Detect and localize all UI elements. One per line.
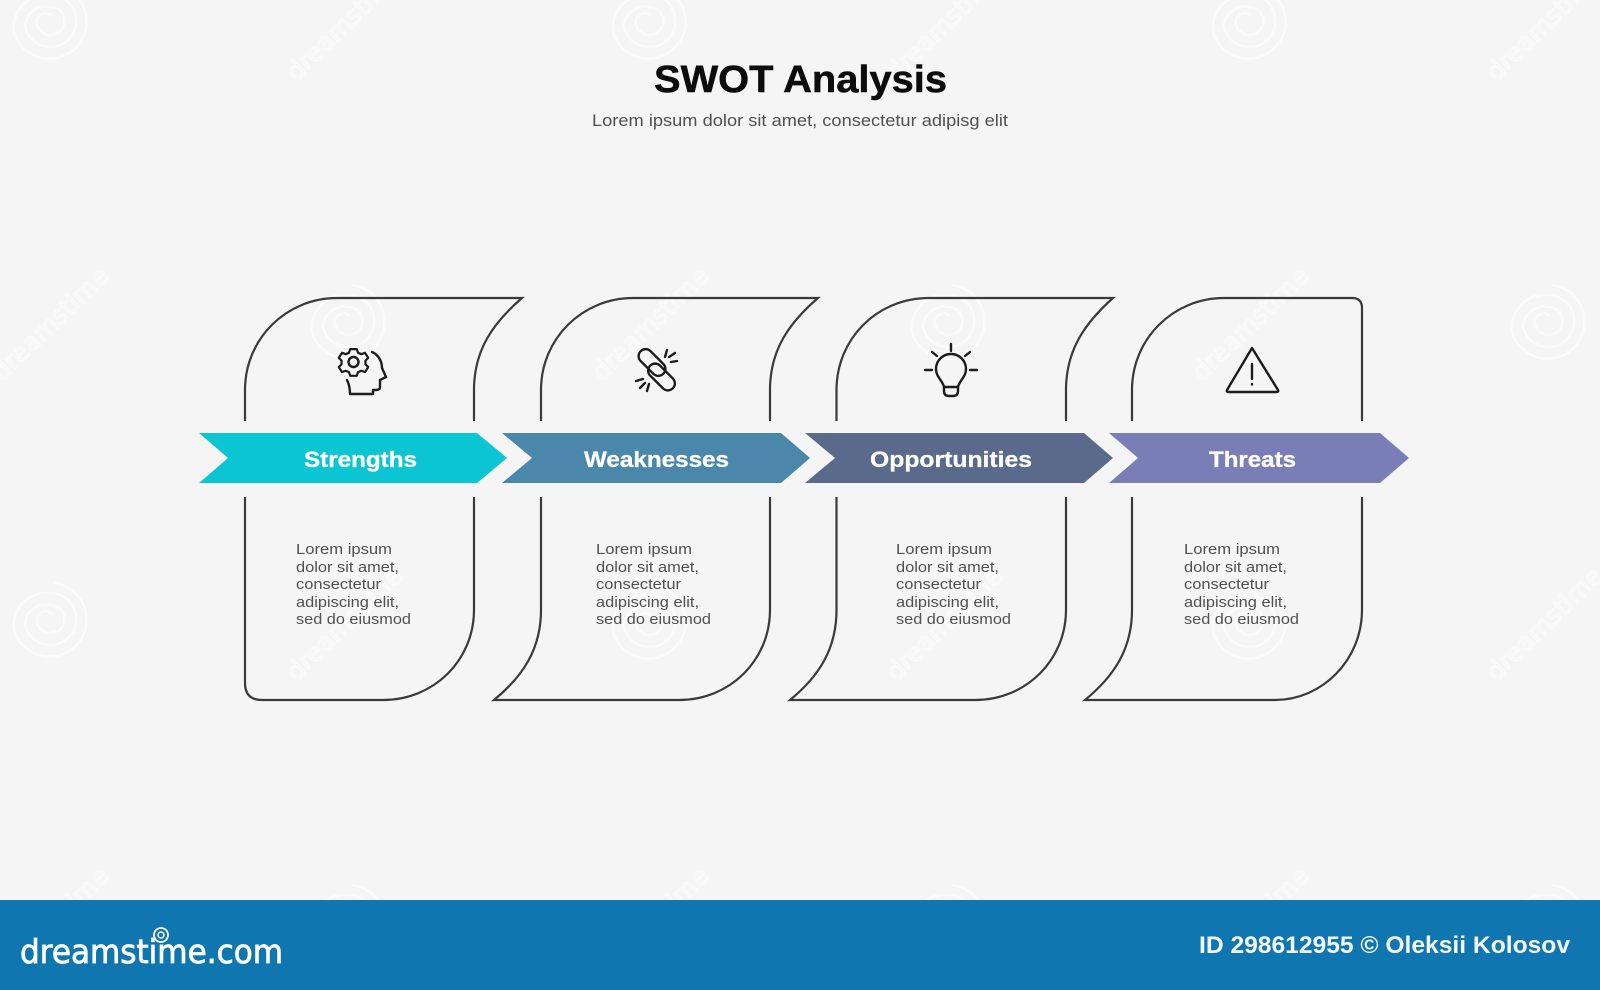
body text: strengths: sed do eiusmod (296, 611, 411, 628)
body text: weaknesses: Lorem ipsum (596, 541, 692, 558)
icon: gear in head (339, 349, 386, 394)
body text: threats (1184, 541, 1299, 628)
body text: strengths: consectetur (296, 576, 381, 593)
arrow: strengths: Strengths (304, 447, 417, 472)
text: dreamstime (586, 861, 714, 986)
body text: weaknesses (596, 541, 711, 628)
icon: warning triangle (1227, 348, 1278, 392)
body text: opportunities: Lorem ipsum (896, 541, 992, 558)
panel: threats card (1085, 298, 1362, 700)
body text: opportunities (896, 541, 1011, 628)
body text: strengths (296, 541, 411, 628)
body text: opportunities: dolor sit amet, (896, 559, 999, 576)
body text: threats: consectetur (1184, 576, 1269, 593)
footer logo: dreamstime.com (20, 932, 283, 971)
arrow: threats (1109, 433, 1409, 483)
title: SWOT Analysis (654, 59, 947, 101)
arrow: strengths (199, 433, 507, 483)
body text: threats: sed do eiusmod (1184, 611, 1299, 628)
text: dreamstime (1186, 861, 1314, 986)
body text: weaknesses: adipiscing elit, (596, 594, 699, 611)
arrow: weaknesses: Weaknesses (584, 447, 729, 472)
arrow: opportunities (805, 433, 1113, 483)
body text: weaknesses: dolor sit amet, (596, 559, 699, 576)
text: dreamstime (1186, 261, 1314, 386)
icon: light bulb (925, 344, 977, 396)
text: dreamstime (280, 561, 408, 686)
body text: strengths: dolor sit amet, (296, 559, 399, 576)
body text: threats: adipiscing elit, (1184, 594, 1287, 611)
body text: threats: Lorem ipsum (1184, 541, 1280, 558)
footer bar (0, 900, 1600, 990)
body text: opportunities: adipiscing elit, (896, 594, 999, 611)
body text: strengths: adipiscing elit, (296, 594, 399, 611)
panel: strengths card (245, 298, 522, 700)
icon: broken chain (636, 346, 678, 393)
arrow: opportunities: Opportunities (870, 447, 1032, 472)
arrow: threats: Threats (1209, 447, 1296, 472)
body text: weaknesses: consectetur (596, 576, 681, 593)
body text: weaknesses: sed do eiusmod (596, 611, 711, 628)
text: dreamstime (880, 561, 1008, 686)
arrow: weaknesses (502, 433, 810, 483)
panel: weaknesses card (494, 298, 818, 700)
body text: opportunities: consectetur (896, 576, 981, 593)
body text: strengths: Lorem ipsum (296, 541, 392, 558)
panel: opportunities card (790, 298, 1113, 700)
text: dreamstime (586, 261, 714, 386)
footer credit: ID 298612955 © Oleksii Kolosov (1199, 932, 1571, 959)
body text: opportunities: sed do eiusmod (896, 611, 1011, 628)
subtitle: Lorem ipsum dolor sit amet, consectetur adipisg elit (592, 112, 1008, 130)
body text: threats: dolor sit amet, (1184, 559, 1287, 576)
